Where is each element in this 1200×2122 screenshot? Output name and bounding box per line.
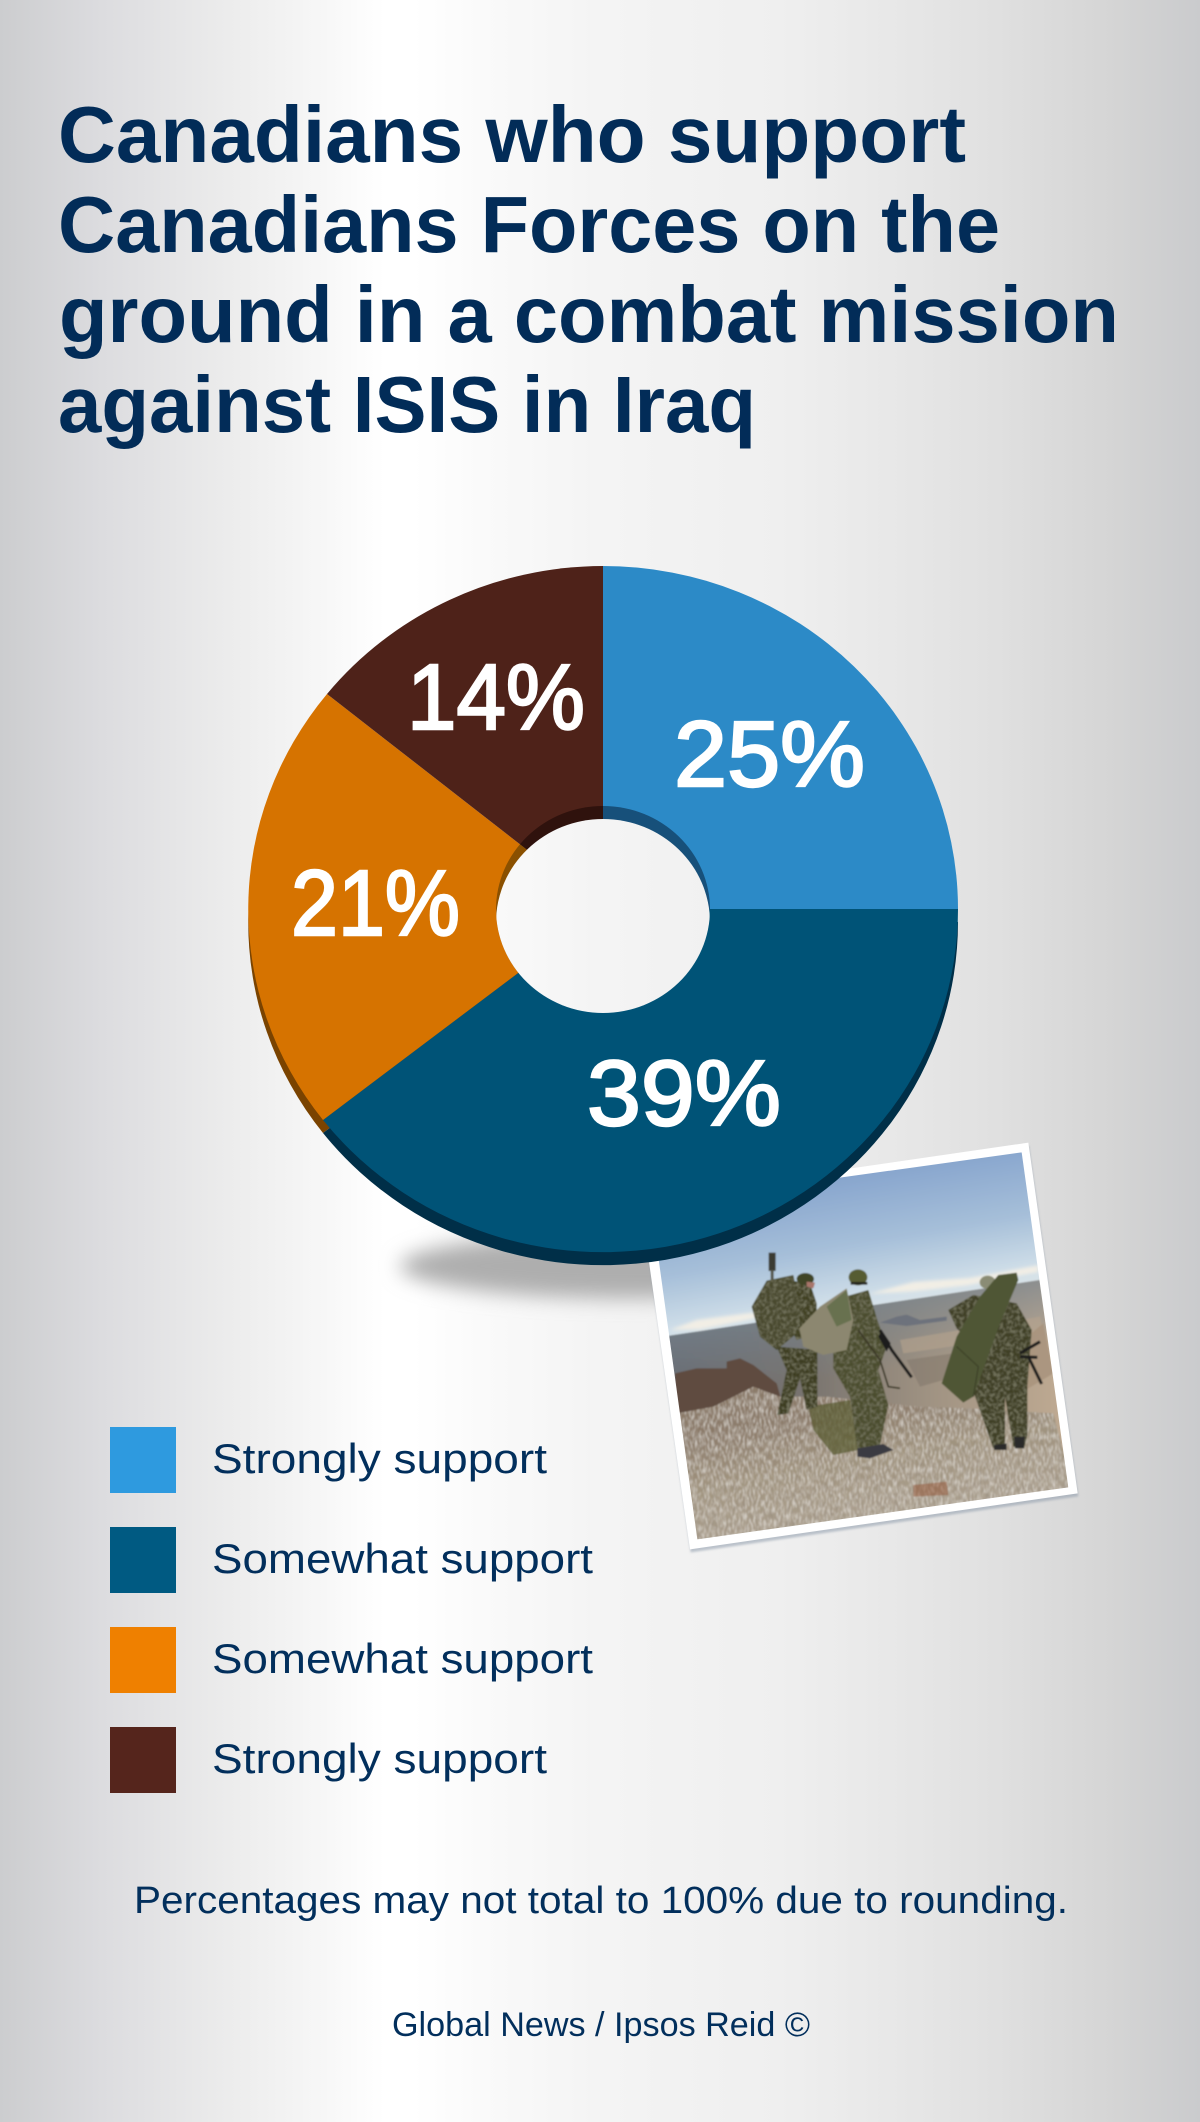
legend item: somewhat support: Somewhat support [212,1535,593,1582]
pie drop shadow [400,1234,850,1298]
grass [677,1387,1073,1543]
donut hole [496,806,710,1013]
segment: 21% somewhat oppose [248,694,603,1120]
title: against ISIS in Iraq [58,360,756,449]
value labels: 21% [291,851,460,955]
clouds on the horizon [670,1265,1038,1330]
soldier middle [799,1269,912,1458]
legend item: strongly support (brown): Strongly support [212,1735,547,1782]
segment: 25% strongly support [603,566,958,909]
photo: soldiers on a ridge [640,1140,1080,1553]
source credit: Global News / Ipsos Reid © [392,2006,810,2044]
rounding note: Percentages may not total to 100% due to rounding. [134,1880,1068,1922]
donut chart [248,566,958,1265]
title: Canadians Forces on the [58,180,1000,269]
value labels: 14% [407,645,585,749]
legend item: somewhat support (orange): Somewhat support [212,1635,593,1682]
value labels: 39% [587,1041,781,1145]
value labels: 25% [674,702,865,806]
segment: 39% somewhat support [323,909,958,1252]
title: Canadians who support [58,90,966,179]
legend item: somewhat support (orange) [110,1627,593,1693]
rocks [674,1358,780,1413]
soldier left [752,1253,817,1415]
legend item: strongly support (brown) [110,1727,547,1793]
photo frame [640,1143,1078,1552]
legend item: strongly support: Strongly support [212,1435,547,1482]
title: ground in a combat mission [59,270,1119,359]
soldier right [942,1273,1042,1450]
legend item: strongly support [110,1427,547,1493]
legend item: somewhat support [110,1527,593,1593]
photo image [658,1152,1068,1540]
legend [110,1427,593,1793]
title [58,90,1119,449]
segment: 14% strongly oppose [327,566,603,909]
value labels [291,645,865,1145]
chart side edge [248,707,958,1265]
